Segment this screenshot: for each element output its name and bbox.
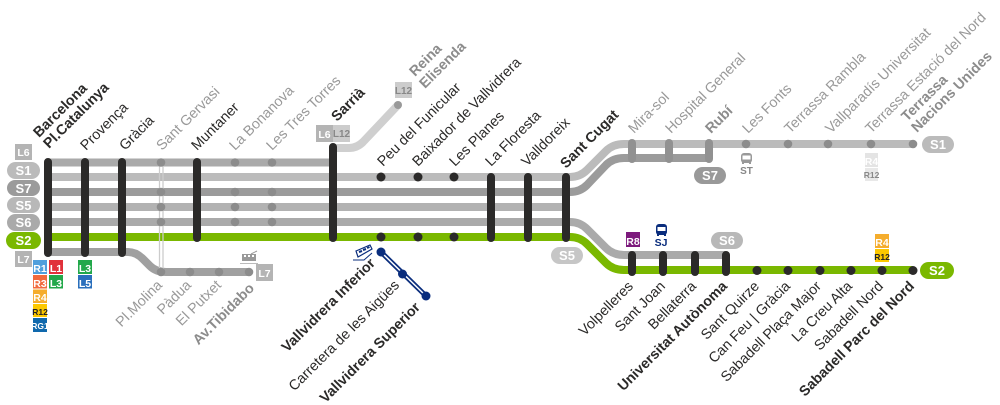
S7 badge: S7 — [702, 168, 718, 183]
L7 badge and tram icon: L7 — [258, 268, 271, 280]
left connection icons: L1 — [50, 263, 62, 275]
line S2 — [48, 237, 913, 270]
S5 badge: S5 — [559, 248, 575, 263]
S6 badge — [711, 232, 743, 249]
left line badges: S1 — [16, 163, 31, 178]
S1 badge: S1 — [930, 137, 946, 152]
top station labels: La Floresta — [483, 108, 544, 170]
ST bus icon — [740, 153, 753, 177]
line L12 branch — [333, 101, 402, 148]
line L7 — [48, 160, 249, 272]
S2 end badge — [920, 262, 954, 279]
S6 badge: S6 — [719, 233, 735, 248]
bottom station labels: Bellaterra — [645, 278, 700, 333]
Sabadell Nord icons — [874, 234, 890, 262]
S7 badge — [694, 167, 726, 184]
bottom station labels: Sabadell Plaça Major — [718, 278, 825, 385]
line S7 — [48, 158, 709, 192]
S1 badge — [922, 136, 954, 153]
bottom station labels: Carretera de les Aigües — [286, 278, 403, 394]
Terrassa icons: R12 — [864, 170, 880, 180]
top station labels: Baixador de Vallvidrera — [410, 55, 525, 170]
interchange bars — [48, 147, 726, 272]
left connection icons: R4 — [33, 292, 47, 304]
top station labels: Sant Cugat — [558, 107, 622, 172]
bottom station labels: La Creu Alta — [789, 278, 856, 345]
left line badges: L6 — [17, 147, 30, 159]
left connection icons — [31, 260, 92, 332]
top station labels: Terrassa Estació del Nord — [863, 10, 990, 137]
top station labels: Nacions Unides — [909, 49, 996, 136]
Terrassa icons: R4 — [865, 156, 878, 168]
Reina Elisenda badge — [395, 82, 413, 98]
top station labels: Elisenda — [417, 38, 470, 92]
bottom station labels: Pàdua — [154, 277, 195, 318]
top station labels: Provença — [78, 100, 132, 154]
S2 end badge: S2 — [929, 263, 945, 278]
top station labels: Peu del Funicular — [375, 80, 465, 170]
grey stations — [157, 140, 917, 276]
line S1 — [48, 144, 913, 177]
top station labels: Hospital General — [663, 50, 749, 137]
L7 badge and tram icon — [240, 251, 273, 281]
left connection icons: R3 — [33, 278, 47, 290]
left connection icons: R12 — [32, 307, 48, 317]
top station labels — [31, 10, 996, 172]
left connection icons: L3 — [79, 263, 91, 275]
bottom station labels: Universitat Autònoma — [615, 278, 732, 395]
funicular icon — [353, 245, 372, 260]
top station labels: Valldoreix — [519, 115, 573, 170]
left line badges: L7 — [17, 254, 30, 266]
Vallvidrera funicular — [376, 248, 430, 300]
left connection icons: L3 — [50, 278, 62, 290]
R8 icon: R8 — [626, 236, 640, 248]
bottom station labels: Sant Joan — [612, 278, 669, 335]
bottom station labels: Vallvidrera Inferior — [279, 255, 379, 356]
left connection icons: RG1 — [31, 321, 49, 331]
ST bus icon: ST — [740, 166, 753, 177]
top station labels: Pl.Catalunya — [41, 79, 113, 152]
Sarrià badges: L6 — [318, 129, 331, 141]
Reina Elisenda badge: L12 — [395, 86, 413, 97]
bottom station labels: Vallvidrera Superior — [317, 299, 424, 405]
bottom station labels: Can Feu | Gràcia — [706, 278, 794, 367]
top station labels: Rubí — [703, 102, 737, 137]
top station labels: Barcelona — [31, 80, 91, 141]
bottom station labels: Volpelleres — [576, 279, 637, 339]
left line badges: S5 — [16, 198, 31, 213]
Sabadell Nord icons: R12 — [874, 252, 890, 262]
line L6 — [48, 158, 333, 166]
left line badges — [6, 144, 41, 267]
top station labels: Terrassa — [899, 71, 952, 125]
top station labels: Les Planes — [447, 108, 508, 170]
Terrassa icons — [864, 153, 880, 181]
bottom station labels: Sabadell Nord — [811, 278, 887, 354]
left line badges: S6 — [16, 215, 31, 230]
Sarrià badges — [316, 125, 351, 142]
left line badges: S7 — [16, 181, 31, 196]
top station labels: Gràcia — [117, 113, 158, 154]
left connection icons: L5 — [79, 278, 91, 290]
SJ bus icon: SJ — [655, 237, 668, 249]
bottom station labels — [113, 255, 918, 405]
bottom station labels: Sabadell Parc del Nord — [796, 279, 918, 400]
top station labels: Les Tres Torres — [264, 73, 344, 154]
line S6 — [48, 222, 726, 255]
left line badges: S2 — [16, 233, 31, 248]
SJ bus icon — [655, 224, 668, 249]
top station labels: Sarrià — [329, 85, 369, 125]
bottom station labels: Sant Quirze — [698, 278, 763, 343]
top station labels: Les Fonts — [740, 81, 795, 137]
bottom station labels: Av.Tibidabo — [190, 280, 258, 348]
top station labels: Muntaner — [189, 100, 243, 154]
bottom station labels: El Putxet — [173, 277, 225, 329]
top station labels: Mira-sol — [626, 90, 673, 137]
top station labels: Terrassa Rambla — [782, 49, 869, 137]
top station labels: La Bonanova — [227, 83, 297, 154]
Sarrià badges: L12 — [333, 129, 351, 140]
bottom station labels: Pl.Molina — [113, 277, 166, 330]
line S5 — [48, 203, 566, 211]
S5 badge — [551, 247, 583, 264]
black stations — [376, 172, 918, 275]
top station labels: Reina — [407, 40, 446, 80]
left connection icons: R1 — [33, 263, 47, 275]
top station labels: Sant Gervasi — [154, 84, 223, 154]
partial interchange bars — [632, 143, 709, 159]
Sabadell Nord icons: R4 — [875, 237, 889, 249]
top station labels: Vallparadís Universitat — [823, 25, 934, 137]
